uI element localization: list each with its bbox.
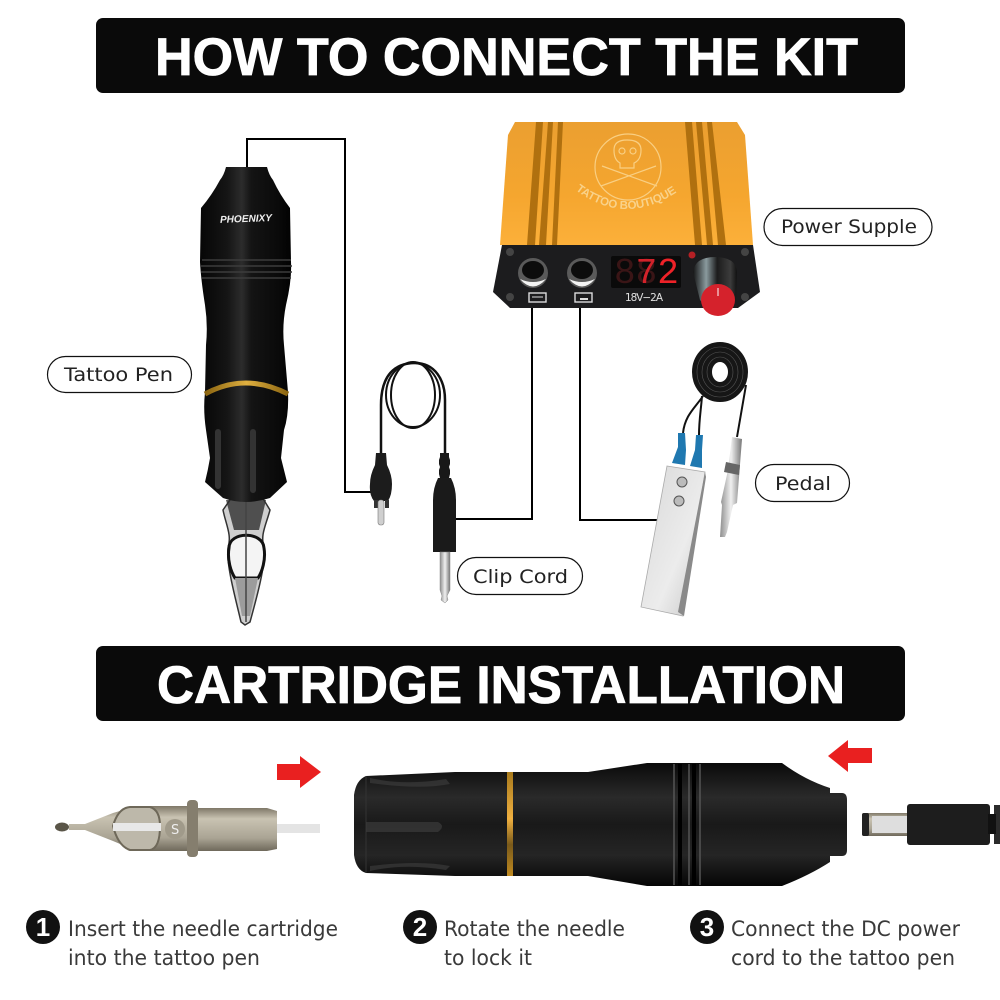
step 3: 3	[700, 912, 714, 942]
label: pedal: Pedal	[775, 473, 831, 495]
step 2: to lock it	[444, 946, 532, 970]
step 1: 1	[36, 912, 50, 942]
skull logo: TATTOO BOUTIQUE	[578, 184, 676, 209]
label: power supple: Power Supple	[781, 216, 917, 238]
tattoo pen vertical	[200, 167, 292, 625]
digital display: 88	[614, 253, 657, 294]
foot pedal	[641, 347, 746, 616]
arrow: right	[277, 756, 321, 788]
digital display: 7	[636, 253, 657, 294]
step 3: Connect the DC power	[731, 917, 960, 941]
skull logo	[578, 133, 676, 209]
label: clip cord: Clip Cord	[473, 566, 568, 588]
label: tattoo pen	[48, 356, 192, 392]
label: tattoo pen: Tattoo Pen	[63, 364, 173, 386]
connection wires	[247, 139, 658, 520]
power supply: 18V−2A	[625, 292, 664, 304]
step 3	[690, 910, 960, 970]
heading: cartridge installation: CARTRIDGE INSTALLATION	[157, 656, 845, 715]
needle cartridge	[55, 800, 320, 857]
power buttons	[518, 258, 597, 302]
step 2	[403, 910, 625, 970]
step 2: Rotate the needle	[444, 917, 625, 941]
cartridge size mark: S	[171, 823, 179, 838]
label: pedal	[756, 464, 850, 502]
step 1	[26, 910, 338, 970]
heading: how to connect the kit: HOW TO CONNECT THE KIT	[155, 28, 858, 87]
label: power supple	[764, 208, 932, 246]
dc power plug	[862, 804, 1000, 845]
step 2: 2	[413, 912, 427, 942]
arrow: left	[828, 740, 872, 772]
digital display	[611, 253, 681, 294]
label: clip cord	[458, 558, 582, 594]
step 3: cord to the tattoo pen	[731, 946, 955, 970]
heading: how to connect the kit	[96, 18, 905, 93]
dial knob	[688, 252, 737, 316]
step 1: Insert the needle cartridge	[68, 917, 338, 941]
digital display: 2	[657, 253, 679, 294]
clip cord	[370, 362, 456, 603]
power supply	[493, 122, 760, 316]
heading: cartridge installation	[96, 646, 905, 721]
step 1: into the tattoo pen	[68, 946, 260, 970]
tattoo pen horizontal	[354, 763, 847, 886]
pen brand text: PHOENIXY	[220, 213, 273, 226]
